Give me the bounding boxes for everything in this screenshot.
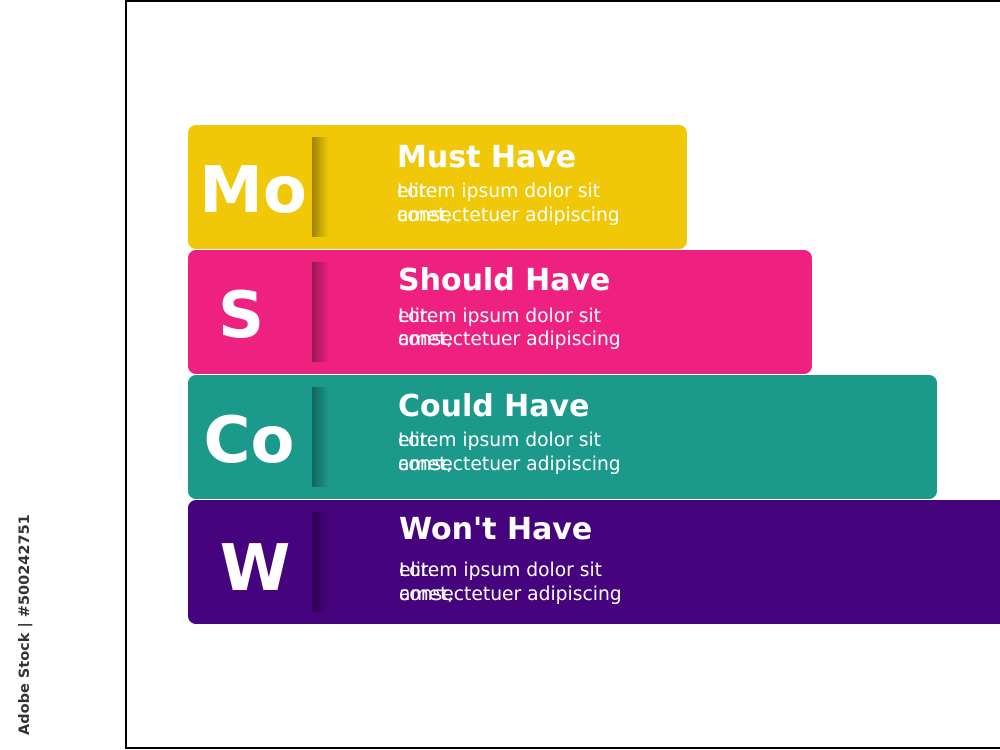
divider shadow <box>312 512 328 612</box>
divider shadow <box>312 137 328 237</box>
panel: won't have <box>188 500 1000 624</box>
body: Lorem ipsum dolor sit <box>397 181 600 202</box>
body: consectetuer adipiscing <box>399 584 622 605</box>
body <box>398 306 621 350</box>
letter Mo: Mo <box>199 154 307 228</box>
letter Co: Co <box>204 404 294 478</box>
body: elit. <box>398 430 433 451</box>
body: amet, <box>397 205 451 226</box>
title: Won't Have <box>399 512 592 547</box>
watermark id text: Adobe Stock | #500242751 <box>17 514 33 735</box>
divider shadow <box>312 387 328 487</box>
body: amet, <box>398 454 452 475</box>
letter S: S <box>218 279 264 353</box>
body: Lorem ipsum dolor sit <box>398 430 601 451</box>
title: Should Have <box>398 263 610 298</box>
body: elit. <box>399 560 434 581</box>
body: amet, <box>399 584 453 605</box>
body <box>398 430 621 475</box>
body: elit. <box>398 306 433 327</box>
title: Could Have <box>398 389 589 424</box>
body: Lorem ipsum dolor sit <box>399 560 602 581</box>
letter W: W <box>220 532 290 606</box>
panel: should have <box>188 250 812 374</box>
body: Lorem ipsum dolor sit <box>398 306 601 327</box>
divider shadow <box>312 262 328 362</box>
title: Must Have <box>397 140 576 175</box>
panel: could have <box>188 375 937 499</box>
body: consectetuer adipiscing <box>398 454 621 475</box>
body <box>397 181 620 226</box>
body: elit. <box>397 181 432 202</box>
body: amet, <box>398 329 452 350</box>
body <box>399 560 622 605</box>
body: consectetuer adipiscing <box>398 329 621 350</box>
panel: must have <box>188 125 687 249</box>
body: consectetuer adipiscing <box>397 205 620 226</box>
